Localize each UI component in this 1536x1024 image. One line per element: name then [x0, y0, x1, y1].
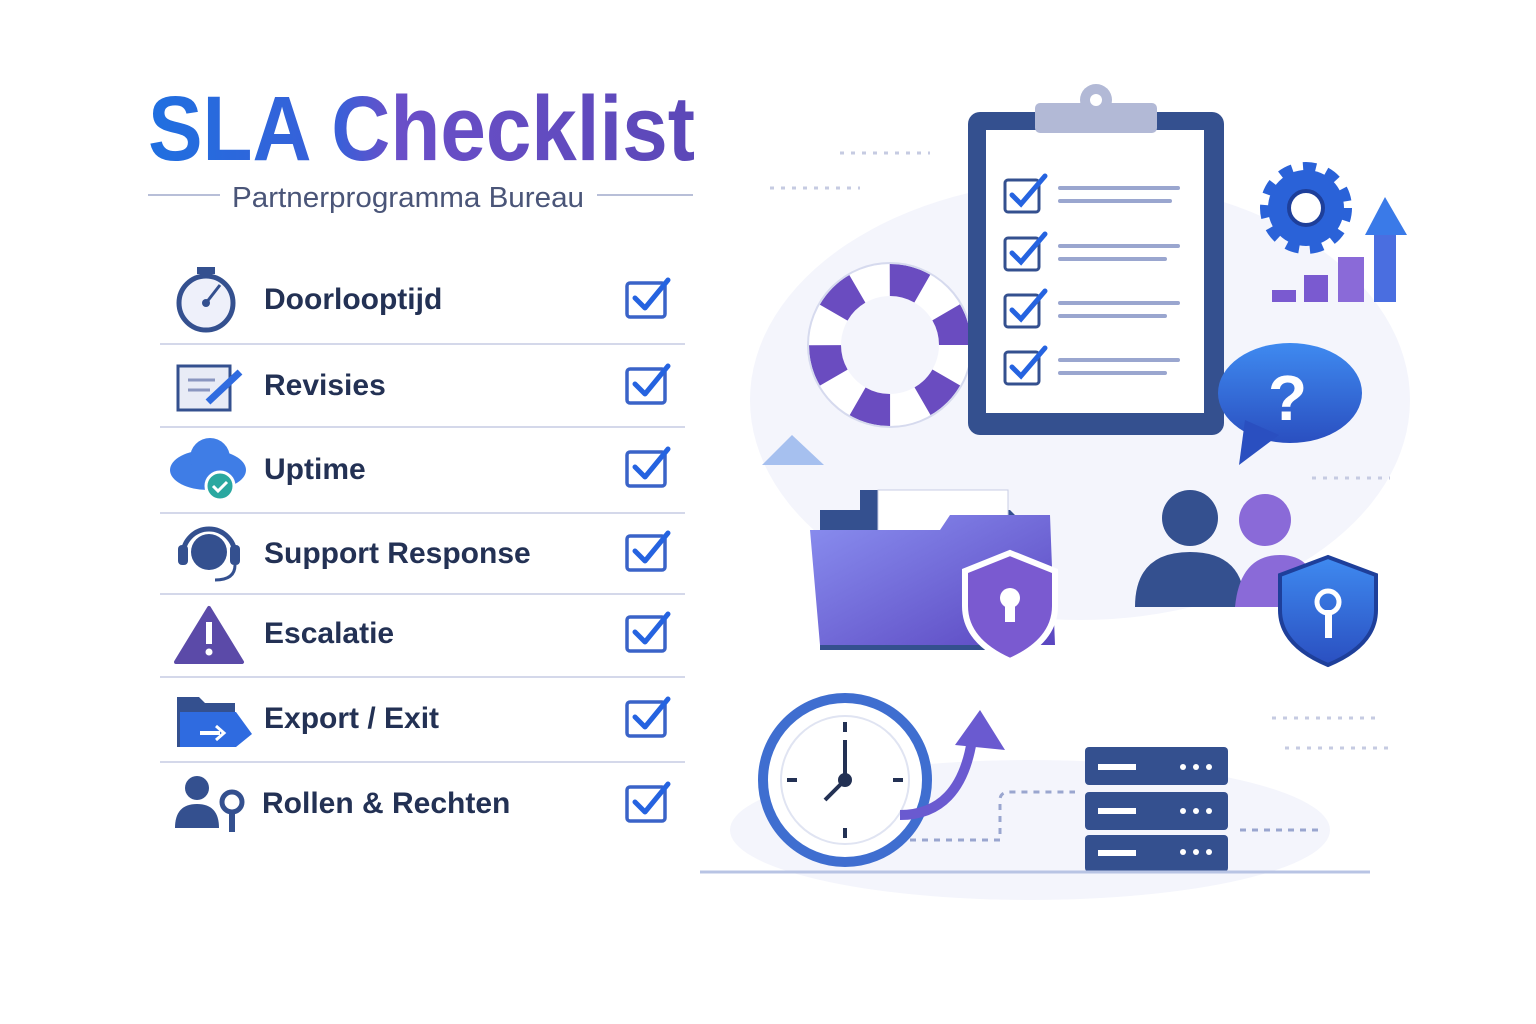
item: Export / Exit: Export / Exit	[264, 702, 439, 735]
folder with shield	[810, 490, 1055, 661]
item: Doorlooptijd	[179, 267, 442, 330]
item: Rollen & Rechten	[175, 776, 510, 832]
item: Revisies	[178, 366, 386, 410]
clipboard	[968, 84, 1224, 435]
item: Escalatie	[176, 608, 394, 662]
people with shield	[1135, 490, 1376, 665]
item: Rollen & Rechten: Rollen & Rechten	[262, 787, 510, 820]
subtitle: Partnerprogramma Bureau	[232, 182, 584, 214]
server	[1085, 747, 1228, 872]
item: Doorlooptijd: Doorlooptijd	[264, 283, 442, 316]
triangle	[762, 435, 824, 465]
checklist	[170, 267, 531, 832]
item: Export / Exit	[177, 697, 439, 747]
item: Support Response	[178, 529, 531, 580]
speech bubble	[1218, 343, 1362, 465]
clock with arrow	[763, 698, 1005, 862]
item: Uptime: Uptime	[264, 453, 366, 486]
gear and bars	[1268, 170, 1407, 302]
checkboxes	[627, 280, 668, 821]
background blobs	[730, 180, 1410, 900]
item: Uptime	[170, 438, 366, 500]
lifebuoy	[801, 256, 979, 434]
speech bubble: ?	[1268, 362, 1307, 434]
title: SLA Checklist	[148, 78, 695, 180]
item: Escalatie: Escalatie	[264, 617, 394, 650]
item: Support Response: Support Response	[264, 537, 531, 570]
item: Revisies: Revisies	[264, 369, 386, 402]
